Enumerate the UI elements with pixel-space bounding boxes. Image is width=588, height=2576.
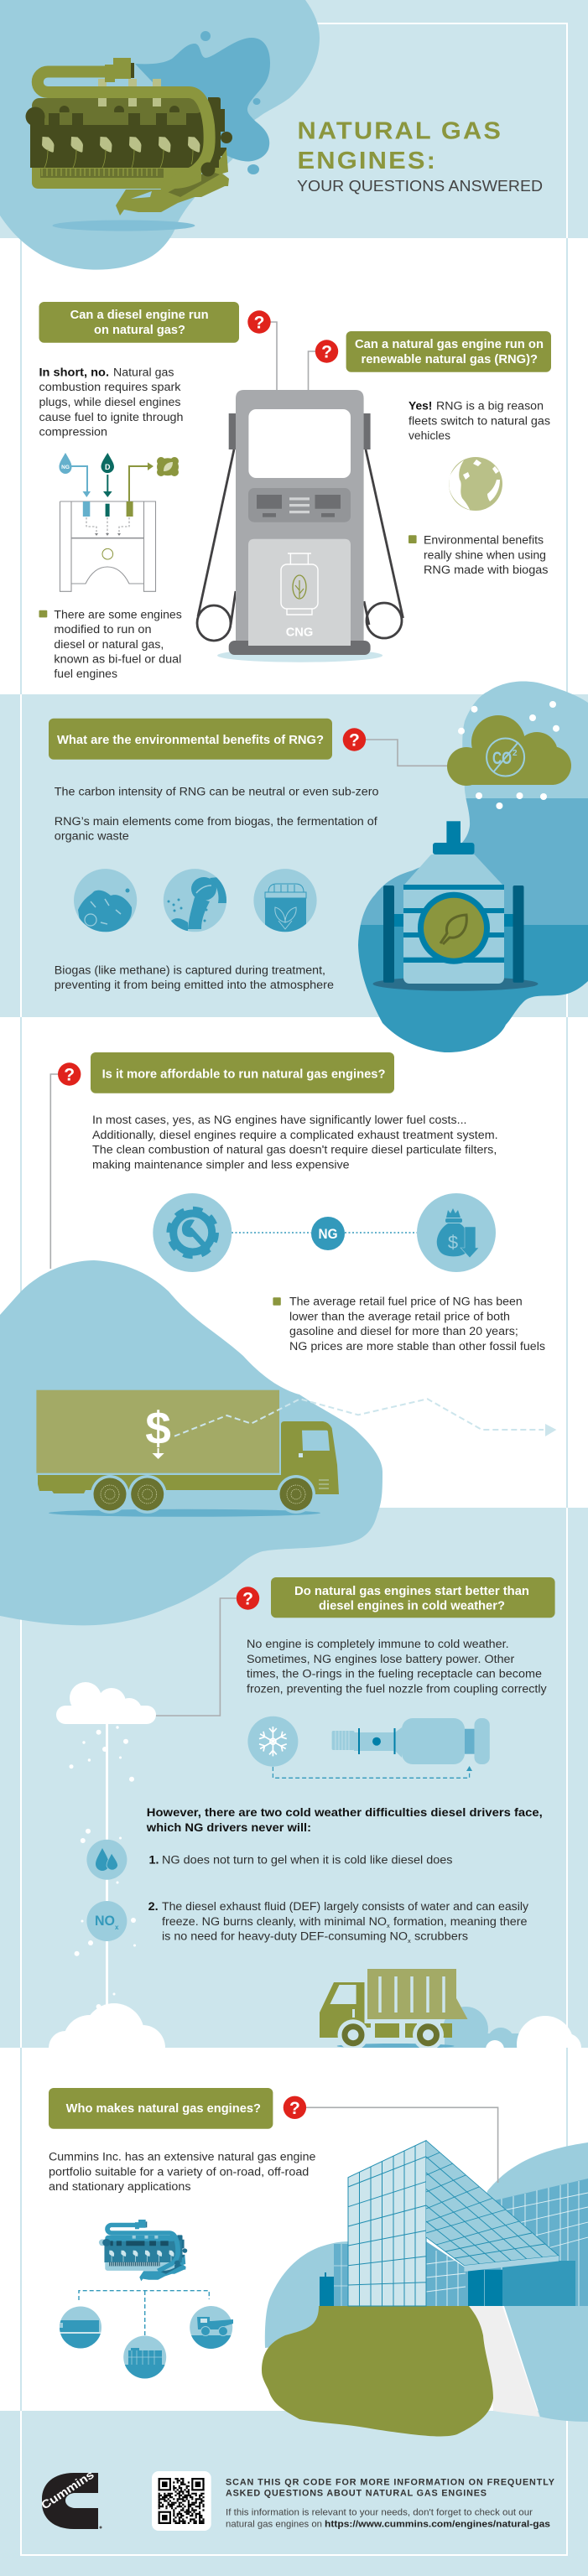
clean strip below snow	[0, 2048, 588, 2073]
background blobs	[265, 2142, 588, 2422]
icon: NOx badge	[86, 1901, 127, 1941]
question: diesel engine	[39, 302, 239, 343]
connector line	[156, 1598, 237, 1716]
question: cold weather: diesel engines in cold weather?	[319, 1600, 505, 1613]
icon: green lawn	[262, 2306, 493, 2436]
icon: on-road truck	[60, 2306, 101, 2348]
icon: no CO2 cloud: 2	[513, 749, 518, 758]
bullet: environmental benefits: Environmental benefits	[424, 534, 544, 547]
icon: question mark	[343, 728, 366, 751]
answer text: in short, no: In short, no.	[39, 366, 109, 378]
connector line	[306, 2107, 498, 2183]
answer text: in short, no: combustion requires spark	[39, 381, 181, 393]
text: point 2: scrubbers	[414, 1930, 468, 1943]
icon: fuel and piston diagram	[59, 453, 179, 591]
connector line	[50, 1074, 58, 1269]
bullet: dual fuel engines: modified to run on	[54, 623, 152, 636]
icon: biogas storage tank	[372, 821, 539, 991]
tower face	[348, 2141, 426, 2306]
text: no engine is immune: frozen, preventing the fuel nozzle from coupling correctly	[247, 1682, 547, 1695]
icon: Cummins logo: Cummins	[39, 2467, 96, 2512]
icon: question mark	[284, 2096, 306, 2119]
answer text: in short, no: Natural gas	[113, 366, 174, 378]
footer heading: SCAN THIS QR CODE FOR MORE INFORMATION ON FREQUENTLY	[226, 2477, 555, 2487]
title: ENGINES:	[297, 148, 437, 174]
NG drop: NG	[61, 465, 70, 470]
title	[297, 118, 543, 195]
icon: Cummins logo	[39, 2467, 102, 2529]
icon: question mark	[58, 1062, 81, 1086]
text: no engine is immune	[247, 1638, 547, 1695]
text: cummins portfolio	[49, 2151, 315, 2193]
darker splash blob	[135, 31, 270, 174]
text: point 2: x	[408, 1937, 411, 1945]
icon: dump truck	[320, 1969, 468, 2050]
text: two cold weather difficulties: which NG drivers never will:	[146, 1821, 311, 1834]
text: carbon intensity	[55, 785, 379, 843]
text: cummins portfolio: Cummins Inc. has an extensive natural gas engine	[49, 2151, 315, 2163]
icon: globe	[449, 457, 502, 511]
icon: fuel nozzle	[332, 1718, 490, 1764]
connector lines to pump	[270, 322, 317, 390]
text: no engine is immune: Sometimes, NG engines lose battery power. Other	[247, 1653, 515, 1665]
bullet: dual fuel engines: diesel or natural gas,	[54, 638, 164, 651]
question: diesel engine: Can a diesel engine run	[70, 309, 209, 322]
question: cold weather	[271, 1577, 555, 1618]
QR code card	[152, 2471, 211, 2531]
footer text with link: https://www.cummins.com/engines/natural-gas	[325, 2519, 550, 2529]
text: no engine is immune: times, the O-rings in the fueling receptacle can become	[247, 1668, 542, 1680]
exhaust puff	[157, 457, 179, 476]
text: two cold weather difficulties: However, there are two cold weather difficulties diesel drivers face,	[147, 1806, 543, 1819]
text: cummins portfolio: portfolio suitable for a variety of on-road, off-road	[49, 2165, 309, 2179]
text: point 2: The diesel exhaust fluid (DEF) largely consists of water and can easily	[162, 1900, 528, 1913]
text: two cold weather difficulties	[146, 1806, 543, 1834]
icon: question mark	[315, 340, 338, 363]
answer text: in short, no: compression	[39, 426, 107, 439]
panel: environmental benefits of RNG	[49, 671, 588, 1067]
text: lower fuel costs: The clean combustion of natural gas doesn't require diesel particulate filters,	[92, 1144, 497, 1156]
footer text with link: If this information is relevant to your needs, don't forget to check out our	[226, 2507, 533, 2517]
big background blob	[0, 1260, 382, 1625]
text: point 2: is no need for heavy-duty DEF-consuming NO	[162, 1930, 408, 1943]
text: biogas capture: preventing it from being emitted into the atmosphere	[55, 979, 334, 991]
icon: compost bin with leaves	[253, 869, 317, 935]
question: who makes: Who makes natural gas engines?	[66, 2102, 261, 2116]
icon: NOx badge: x	[115, 1924, 119, 1931]
title: NATURAL GAS	[297, 118, 502, 145]
icon: stationary plant	[123, 2336, 167, 2381]
bullet: retail fuel price: The average retail fuel price of NG has been	[289, 1296, 523, 1308]
NG drop	[59, 453, 72, 474]
header background blob	[0, 0, 320, 270]
icon: NOx badge: NO	[95, 1914, 115, 1929]
icon: white cloud	[56, 1682, 156, 1724]
icon: wastewater pipe	[164, 869, 228, 932]
question: environmental benefits: What are the environmental benefits of RNG?	[57, 734, 324, 747]
icon: question mark	[237, 1587, 259, 1610]
icon: delivery truck with falling price	[36, 1390, 556, 1517]
text: point 2: x	[387, 1922, 390, 1929]
icon: money bag with down arrow: $	[448, 1232, 458, 1253]
question: who makes	[49, 2088, 273, 2129]
text: biogas capture	[55, 963, 334, 991]
question: diesel engine: on natural gas?	[94, 324, 185, 337]
snow pole and flakes	[69, 1719, 136, 2009]
bullet: dual fuel engines	[39, 608, 182, 680]
icon: organic waste heap	[74, 869, 137, 933]
answer text: yes: fleets switch to natural gas	[408, 414, 550, 427]
entrance and wall	[468, 2261, 575, 2306]
bullet: environmental benefits: RNG made with biogas	[424, 564, 549, 576]
bullet: dual fuel engines: fuel engines	[54, 667, 117, 680]
icon: question mark	[247, 310, 271, 334]
gas cylinder	[281, 553, 318, 615]
bullet: retail fuel price	[273, 1296, 545, 1353]
text: carbon intensity: The carbon intensity of RNG can be neutral or even sub-zero	[55, 785, 379, 797]
dotted connector	[232, 1232, 417, 1233]
right wing	[426, 2179, 588, 2306]
text: carbon intensity: RNG’s main elements come from biogas, the fermentation of	[55, 815, 377, 828]
icon: question mark: ?	[289, 2099, 300, 2118]
low left wing	[320, 2244, 348, 2306]
answer text: in short, no: cause fuel to ignite through	[39, 411, 183, 423]
answer text: in short, no: plugs, while diesel engines	[39, 396, 181, 408]
question: affordability: Is it more affordable to run natural gas engines?	[102, 1067, 386, 1081]
icon: NG badge	[311, 1217, 345, 1250]
footer heading	[226, 2477, 555, 2498]
D drop: D	[105, 463, 111, 471]
panel: affordability	[0, 1052, 556, 1625]
icon: CNG fuel pump: CNG	[286, 626, 313, 640]
icon: question mark: ?	[64, 1065, 75, 1085]
icon: fluid drops	[86, 1840, 127, 1880]
footer heading: ASKED QUESTIONS ABOUT NATURAL GAS ENGINES	[226, 2488, 487, 2498]
banded background blob	[358, 681, 588, 1052]
text: point 2: freeze. NG burns cleanly, with minimal NO	[162, 1915, 387, 1928]
bullet: environmental benefits: really shine when using	[424, 548, 546, 562]
panel: cold weather	[0, 1577, 588, 2073]
bullet: dual fuel engines: known as bi-fuel or dual	[54, 653, 181, 666]
question: renewable natural gas: Can a natural gas engine run on	[355, 338, 544, 351]
question: renewable natural gas: renewable natural gas (RNG)?	[361, 353, 538, 366]
icon: NG badge: NG	[319, 1226, 337, 1242]
bullet: retail fuel price: lower than the average retail price of both	[289, 1310, 510, 1323]
icon: gray road	[469, 2306, 539, 2417]
title: YOUR QUESTIONS ANSWERED	[297, 178, 543, 195]
icon: snowflake	[247, 1716, 298, 1767]
text: biogas capture: Biogas (like methane) is captured during treatment,	[55, 963, 325, 976]
icon: question mark: ?	[349, 731, 360, 750]
text: cummins portfolio: and stationary applications	[49, 2180, 191, 2193]
icon: question mark: ?	[254, 314, 264, 332]
text: point 2: formation, meaning there	[393, 1915, 527, 1928]
text: point 2: 2.	[148, 1900, 159, 1913]
rain dots	[458, 701, 559, 809]
dashed tree connector	[79, 2291, 209, 2336]
question: affordability	[91, 1052, 394, 1093]
bullet: retail fuel price: NG prices are more stable than other fossil fuels	[289, 1340, 545, 1353]
icon: off-road hauler	[188, 2306, 234, 2350]
bullet: environmental benefits	[408, 534, 549, 576]
answer text: yes: RNG is a big reason	[436, 400, 544, 413]
icon: CNG fuel pump	[197, 390, 403, 662]
text: point 1: NG does not turn to gel when it is cold like diesel does	[162, 1854, 453, 1867]
dollar with down arrow: $	[145, 1402, 171, 1454]
panel: header	[0, 0, 543, 270]
text: lower fuel costs: In most cases, yes, as NG engines have significantly lower fuel costs...	[92, 1114, 466, 1126]
footer text with link: natural gas engines on	[226, 2519, 322, 2529]
bullet: retail fuel price: gasoline and diesel for more than 20 years;	[289, 1325, 518, 1337]
bullet: dual fuel engines: There are some engines	[54, 608, 182, 621]
panel: can engines run on natural gas	[39, 302, 551, 680]
answer text: in short, no	[39, 366, 183, 439]
connector line to cloud	[366, 740, 448, 766]
text: point 1: 1.	[149, 1854, 159, 1867]
text: carbon intensity: organic waste	[55, 830, 129, 843]
icon: question mark: ?	[242, 1590, 253, 1608]
panel: footer	[39, 2467, 555, 2531]
shadow under engine	[52, 220, 195, 231]
question: renewable natural gas	[346, 331, 551, 372]
icon: natural gas engine	[25, 58, 232, 216]
icon: question mark: ?	[321, 342, 332, 362]
question: environmental benefits	[49, 719, 332, 760]
icon: no CO2 cloud: CO	[492, 749, 512, 768]
price trend arrow	[174, 1399, 556, 1436]
text: no engine is immune: No engine is completely immune to cold weather.	[247, 1638, 509, 1650]
D drop	[101, 453, 114, 473]
answer text: yes: Yes!	[408, 400, 432, 413]
glass roof	[426, 2141, 559, 2272]
answer text: yes	[408, 400, 550, 442]
text: lower fuel costs	[92, 1114, 498, 1171]
icon: blue engine	[99, 2220, 187, 2281]
text: lower fuel costs: making maintenance simpler and less expensive	[92, 1158, 350, 1171]
panel: who makes natural gas engines	[49, 2088, 588, 2436]
answer text: yes: vehicles	[408, 429, 450, 442]
icon: money bag with down arrow	[417, 1193, 496, 1272]
icon: gear and wrench	[153, 1193, 232, 1272]
question: cold weather: Do natural gas engines start better than	[294, 1585, 529, 1598]
text: lower fuel costs: Additionally, diesel engines require a complicated exhaust treatment system.	[92, 1129, 498, 1141]
blue cloud behind truck	[443, 2007, 520, 2054]
icon: no CO2 cloud	[447, 715, 571, 786]
snow mounds	[49, 2003, 581, 2073]
footer text with link	[226, 2507, 550, 2529]
icon: glass office building	[320, 2141, 588, 2306]
dashed arrow: snowflake to nozzle	[273, 1766, 472, 1778]
text: point 2	[148, 1900, 528, 1945]
